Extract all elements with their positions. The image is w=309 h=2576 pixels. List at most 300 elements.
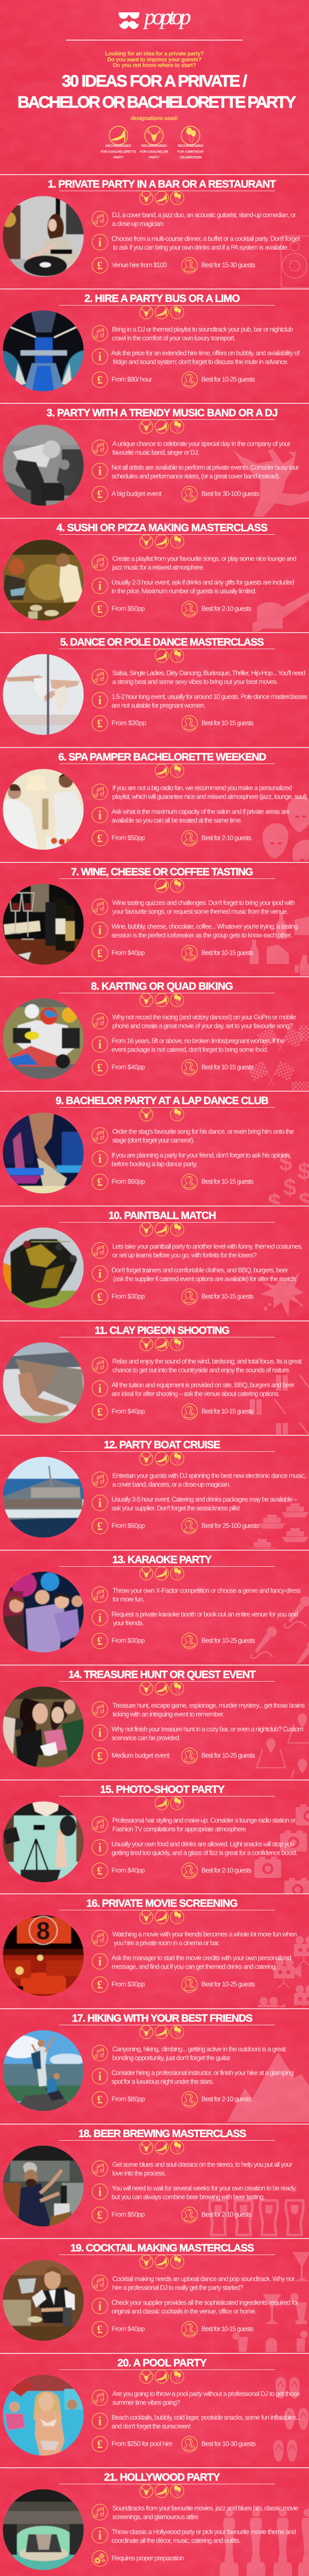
music tip: Soundtracks from your favourite movies, jazz and blues hits, classic movie <box>112 2504 299 2512</box>
budget <box>92 1518 145 1534</box>
suitability icons <box>155 1797 184 1810</box>
info tip: event package is not catered, don't forget to bring some food. <box>112 1046 268 1053</box>
budget <box>92 1977 145 1992</box>
music tip: or set up teams before you go, with forfeits for the losers? <box>112 1251 257 1259</box>
info tip: All the tuition and equipment is provided on site. BBQ, burgers and beer <box>112 1381 295 1389</box>
info tip: original and classic cocktails in the venue, office or home. <box>112 2307 256 2315</box>
music tip: crawl in the comfort of your own luxury transport. <box>112 334 235 342</box>
info tip <box>92 578 294 595</box>
info tip <box>92 1266 297 1283</box>
guests <box>182 1404 254 1419</box>
heading: 3. PARTY WITH A TRENDY MUSIC BAND OR A DJ <box>46 407 278 419</box>
music tip: Cocktail making needs an upbeat dance and pop soundtrack. Why not <box>112 2275 295 2282</box>
music tip: Wine tasting quizzes and challenges. Don't forget to bring your ipod with <box>112 899 295 907</box>
budget: From $30pp <box>112 1636 145 1645</box>
info tip: 1.5-2 hour long event, usually for around 10 guests. Pole dance masterclasses <box>112 692 308 701</box>
suitability icons <box>140 2255 184 2268</box>
music tip: Get some blues and soul classics on the stereo, to help you put all your <box>112 2161 293 2168</box>
guests <box>182 372 255 387</box>
heading: 11. CLAY PIGEON SHOOTING <box>95 1325 230 1336</box>
guests <box>182 1977 255 1992</box>
ghost icon: checkered flags <box>248 1025 309 1093</box>
info tip: scenarios can be provided. <box>112 1734 181 1741</box>
section 13 <box>0 1550 309 1672</box>
info tip <box>92 1610 298 1627</box>
heading: 10. PAINTBALL MATCH <box>108 1210 216 1222</box>
suitability icons <box>140 1910 184 1924</box>
legend: bachelorette <box>101 126 136 160</box>
music tip: Relax and enjoy the sound of the wind, birdsong, and total focus. Its a great <box>112 1357 302 1365</box>
photo: photo studio <box>3 1801 84 1883</box>
budget: Medium budget event <box>112 1752 169 1759</box>
music tip <box>92 669 305 685</box>
guests <box>182 2092 252 2107</box>
section 20 <box>0 2353 309 2462</box>
info tip: your friends. <box>113 1619 144 1627</box>
section 15 <box>0 1780 309 1899</box>
ghost icon: map pins <box>256 1714 309 1788</box>
music tip: jazz music for a relaxed atmosphere. <box>112 564 204 571</box>
photo: club dancer heel <box>3 1112 84 1194</box>
heading: 6. SPA PAMPER BACHELORETTE WEEKEND <box>58 751 266 763</box>
suitability icons <box>140 1223 184 1236</box>
music tip: Salsa, Single Ladies, Dirty Dancing, Burlesque, Thriller, Hip-Hop... You'll need <box>112 669 305 677</box>
music tip: love into the process. <box>112 2169 166 2177</box>
preparation: Requires proper preparation <box>112 2554 184 2562</box>
info tip: Usually 3-5 hour event. Catering and drinks packages may be available – <box>112 1495 298 1503</box>
legend: birthday: FOR A BIRTHDAY <box>177 150 204 154</box>
guests <box>182 1633 255 1649</box>
info tip: Don't forget trainers and comfortable clothes, and BBQ, burgers, beer <box>112 1266 288 1274</box>
budget <box>92 1060 145 1075</box>
suitability icons <box>140 2484 184 2498</box>
music tip <box>92 211 296 228</box>
intro questions: Looking for an idea for a private party? <box>105 50 204 57</box>
photo: party bus interior <box>3 310 84 392</box>
budget <box>92 2207 145 2223</box>
heading: 15. PHOTO-SHOOT PARTY <box>100 1784 225 1795</box>
guests <box>182 2207 252 2223</box>
info tip <box>92 2298 299 2315</box>
section 9 <box>0 1091 309 1215</box>
music tip <box>92 1587 301 1603</box>
info tip <box>92 1381 295 1397</box>
info tip: Ask what is the maximum capacity of the salon and if private areas are <box>112 808 290 815</box>
guests: Best for 10-15 guests <box>201 1178 254 1185</box>
suitability icons <box>155 879 184 892</box>
info tip <box>92 1954 291 1970</box>
info tip: are ideal for after shooting – ask the venue about catering options. <box>112 1390 280 1397</box>
photo: bartender <box>3 2260 84 2341</box>
budget: From $50pp <box>112 834 145 842</box>
guests <box>182 486 260 502</box>
music tip <box>92 2045 286 2062</box>
guests: Best for 10-15 guests <box>201 949 254 956</box>
budget <box>92 1863 145 1878</box>
heading: 8. KARTING OR QUAD BIKING <box>91 980 233 992</box>
heading: 4. SUSHI OR PIZZA MAKING MASTERCLASS <box>57 522 268 534</box>
ghost icon: dollar signs: $ <box>268 1189 281 1215</box>
guests: Best for 2-10 guests <box>201 2210 252 2218</box>
info tip: If you are planning a party for your friend, don't forget to ask his opinion <box>112 1151 290 1159</box>
info tip: session is the perfect icebreaker as the group gets to know each other. <box>112 931 293 939</box>
music tip: Order the stag's favourite song for his dance, or even bring him onto the <box>112 1127 294 1136</box>
heading: 5. DANCE OR POLE DANCE MASTERCLASS <box>60 636 264 648</box>
guests <box>182 1863 252 1878</box>
info tip: From 16 years, 5ft or above, no broken limbs/pregnant women. If the <box>112 1037 285 1045</box>
photo: karaoke singers <box>3 1571 84 1653</box>
music tip: Create a playlist from your favourite songs, or play some nice lounge and <box>112 554 297 563</box>
photo: band on stage <box>3 425 84 506</box>
ghost icon: dollar signs: $ <box>279 1149 293 1176</box>
guests <box>182 1289 254 1304</box>
ghost icon: wine and cheese <box>250 913 309 976</box>
photo: glamorous pool party <box>3 2489 84 2570</box>
legend: bachelorette: PARTY <box>113 156 124 160</box>
budget: From $40pp <box>112 1063 145 1071</box>
photo: spa friends in robes <box>3 769 84 850</box>
guests: Best for 10-15 guests <box>201 2325 254 2333</box>
music tip <box>92 1357 302 1374</box>
music tip: A unique chance to celebrate your special day in the company of your <box>112 440 291 447</box>
info tip <box>92 349 300 366</box>
music tip: stage (don't forget your camera!). <box>112 1137 195 1144</box>
guests <box>182 1518 260 1534</box>
info tip: to ask if you can bring your own drinks and if a PA system is available. <box>113 243 289 251</box>
guests <box>182 945 254 961</box>
music tip: bonding opportunity, just don't forget the guitar <box>112 2054 231 2062</box>
music tip <box>92 1701 305 1718</box>
guests: Best for 10-15 guests <box>201 1292 254 1300</box>
heading: 18. BEER BREWING MASTERCLASS <box>78 2128 246 2140</box>
guests <box>182 258 255 273</box>
budget: From $40pp <box>112 1408 145 1415</box>
ghost icon: pot and knife <box>252 592 309 632</box>
music tip <box>92 784 307 801</box>
guests: Best for 2-10 guests <box>201 2095 252 2103</box>
intro questions <box>105 50 204 69</box>
music tip: Why not record the racing (and victory dances!) on your GoPro or mobile <box>112 1013 296 1021</box>
music tip <box>92 326 293 342</box>
budget: From $250 for pool hire <box>112 2440 173 2447</box>
music tip <box>92 2275 295 2292</box>
guests: Best for 10-30 guests <box>201 2440 256 2447</box>
info tip <box>92 1840 298 1857</box>
budget <box>92 2436 173 2452</box>
suitability icons <box>140 1567 184 1580</box>
guests: Best for 30-100 guests <box>201 489 260 498</box>
guests <box>182 2436 256 2452</box>
photo: cinema countdown screen <box>3 1915 84 1996</box>
music tip: your favourite songs, or request some themed music from the venue. <box>112 908 288 915</box>
guests <box>182 2321 254 2337</box>
music tip: phone and create a great movie of your day, set to your favourite song? <box>112 1022 293 1029</box>
suitability icons <box>140 1337 184 1351</box>
budget <box>92 601 145 617</box>
photo: DJ at turntables <box>1 196 84 277</box>
heading: 7. WINE, CHEESE OR COFFEE TASTING <box>71 866 253 878</box>
budget: From $40pp <box>112 1866 145 1874</box>
guests: Best for 10-25 guests <box>201 375 255 383</box>
guests <box>182 601 252 617</box>
section 17 <box>0 2008 309 2123</box>
music tip: summer time vibes going? <box>112 2399 180 2406</box>
guests: Best for 15-30 guests <box>201 261 255 269</box>
intro questions: Do you not know where to start? <box>113 62 196 69</box>
ghost icon: beer glasses <box>210 2200 303 2235</box>
music tip: Fashion TV compilations for appropriate atmosphere <box>112 1825 246 1833</box>
heading: 20. A POOL PARTY <box>117 2357 207 2369</box>
info tip: Consider hiring a professional instructor, or finish your hike at a glamping <box>112 2069 294 2076</box>
title <box>18 72 296 111</box>
budget: From $60pp <box>112 1178 145 1185</box>
music tip: you hire a private room in a cinema or bar. <box>114 1939 220 1946</box>
info tip: and don't forget the sunscreen! <box>112 2422 191 2430</box>
guests: Best for 10-15 guests <box>201 1063 254 1071</box>
info tip: Usually your own food and drinks are allowed. Light snacks will stop you <box>112 1840 294 1848</box>
legend: birthday: CELEBRATION <box>179 156 202 160</box>
legend: bachelor <box>140 126 168 160</box>
heading: 2. HIRE A PARTY BUS OR A LIMO <box>84 293 240 304</box>
budget <box>92 1174 145 1190</box>
section 12 <box>0 1435 309 1553</box>
photo: brewer at the tap <box>3 2145 84 2227</box>
heading: 9. BACHELOR PARTY AT A LAP DANCE CLUB <box>56 1095 269 1107</box>
ghost icon: rock star silhouette <box>233 449 309 517</box>
legend: bachelor: FOR A BACHELOR <box>140 150 168 154</box>
music tip: chance to get out into the countryside and enjoy the sounds of nature. <box>112 1366 290 1374</box>
photo: wine bottles and glasses <box>3 884 84 965</box>
budget <box>92 945 145 961</box>
heading: 1. PRIVATE PARTY IN A BAR OR A RESTAURANT <box>48 178 276 190</box>
section 2 <box>0 289 309 392</box>
ghost icon: speaker <box>281 236 309 287</box>
info tip: Choose from a multi-course dinner, a buffet or a cocktail party. Don't forget <box>112 235 300 242</box>
music tip: for more fun. <box>112 1595 144 1603</box>
photo: friends reading clue <box>3 1686 84 1768</box>
budget <box>92 2092 145 2107</box>
info tip <box>92 1151 290 1167</box>
music tip <box>92 1471 306 1488</box>
info tip <box>92 2413 301 2430</box>
ghost icon: microphones <box>251 1594 309 1672</box>
photo: paintball team <box>3 1227 84 1309</box>
section 21 <box>0 2467 309 2576</box>
music tip: Throw your own X-Factor competition or choose a genre and fancy-dress <box>112 1587 301 1594</box>
budget <box>92 2321 145 2337</box>
info tip: ask your supplier. Don't forget the seasickness pills! <box>112 1504 240 1512</box>
preparation <box>92 2551 184 2566</box>
music tip: Treasure hunt, escape game, espionage, murder mystery... get those brains <box>112 1701 305 1709</box>
info tip: coordinate all the décor, music, catering and outfits. <box>112 2537 241 2544</box>
section 1 <box>0 174 309 287</box>
music tip: favourite music band, singer or DJ. <box>112 448 199 456</box>
section 14 <box>0 1665 309 1788</box>
music tip: If you are not a big radio fan, we recommend you make a personalized <box>112 784 292 791</box>
logo: poptop <box>143 4 191 29</box>
suitability icons <box>140 1452 184 1465</box>
info tip: are not suitable for pregnant women. <box>112 702 205 709</box>
info tip: message, and find out if you can get themed drinks and catering. <box>112 1963 277 1970</box>
guests: Best for 10-15 guests <box>201 1408 254 1415</box>
heading: 21. HOLLYWOOD PARTY <box>104 2471 220 2483</box>
music tip <box>92 554 297 571</box>
music tip: Bring in a DJ or themed playlist to soundtrack your pub, bar or nightclub <box>112 326 293 333</box>
budget: From $30pp <box>112 1980 145 1988</box>
intro questions: Do you want to impress your guests? <box>107 57 202 63</box>
section 16 <box>0 1893 309 2027</box>
info tip <box>92 2069 294 2086</box>
heading: 12. PARTY BOAT CRUISE <box>104 1439 220 1451</box>
budget <box>92 831 145 846</box>
guests <box>182 1174 254 1190</box>
legend: bachelor: PARTY <box>149 156 160 160</box>
info tip: Request a private karaoke booth or book out an entire venue for you and <box>112 1611 298 1618</box>
music tip <box>92 2504 299 2520</box>
budget <box>92 1633 145 1649</box>
ghost icon: cruise boats <box>249 1503 308 1553</box>
title: 30 IDEAS FOR A PRIVATE / <box>62 72 247 90</box>
ghost icon: cocktails <box>232 2252 309 2352</box>
photo: pool party <box>3 2375 84 2456</box>
music tip: ticking with an intriguing event to remember. <box>112 1710 225 1718</box>
title: BACHELOR OR BACHELORETTE PARTY <box>18 93 296 111</box>
header <box>18 4 296 160</box>
music tip: screenings, and glamourous attire <box>112 2513 199 2520</box>
photo: hand holding shotgun <box>3 1342 84 1423</box>
info tip <box>92 1037 285 1053</box>
info tip: Why not finish your treasure hunt in a cozy bar, or even a nightclub? Custom <box>112 1725 303 1733</box>
ghost icon: cameras <box>254 1804 309 1899</box>
budget: A big budget event <box>112 489 162 498</box>
music tip <box>92 1243 303 1259</box>
section 4 <box>0 518 309 632</box>
ghost icon: film awards statuettes <box>220 2509 309 2576</box>
guests <box>182 831 252 846</box>
music tip <box>92 2389 300 2406</box>
heading: 17. HIKING WITH YOUR BEST FRIENDS <box>72 2012 253 2024</box>
suitability icons <box>140 2370 184 2383</box>
guests <box>182 1748 255 1764</box>
budget <box>92 372 152 387</box>
guests: Best for 10-25 guests <box>201 1752 255 1759</box>
info tip: Not all artists are available to perform at private events. Consider busy tour <box>112 464 299 471</box>
music tip <box>92 1930 297 1946</box>
info tip: Throw classic a Hollywood party or pick your favourite movie theme and <box>112 2528 296 2536</box>
info tip <box>92 922 298 939</box>
suitability icons <box>155 764 184 777</box>
suitability icons <box>140 306 184 319</box>
music tip: a close-up magician. <box>112 219 164 228</box>
music tip: Entertain your guests with DJ spinning the best new electronic dance music, <box>112 1471 306 1480</box>
info tip: spot for a luxurious night under the stars. <box>112 2077 214 2086</box>
music tip: Canyoning, hiking, climbing... getting active in the outdoors is a great <box>112 2045 286 2053</box>
guests <box>182 716 254 731</box>
photo: chef masterclass <box>3 539 84 621</box>
section 18 <box>0 2124 309 2235</box>
info tip <box>92 1725 303 1741</box>
ghost icon: dollar signs <box>268 1149 309 1215</box>
music tip: Watching a movie with your friends becomes a whole lot more fun when <box>112 1930 297 1938</box>
budget: From $40pp <box>112 949 145 956</box>
info tip: getting tired too quickly, and a glass of fizz is great for a confidence boost. <box>112 1849 298 1857</box>
guests <box>182 1060 254 1075</box>
ghost icon: paint splat <box>260 1273 304 1316</box>
budget <box>92 1289 145 1304</box>
music tip <box>92 440 291 456</box>
info tip: (ask the supplier if catered event options are available) for after the match. <box>113 1275 297 1283</box>
info tip: Wine, bubbly, cheese, chocolate, coffee... Whatever you're trying, a tasting <box>112 922 298 930</box>
info tip <box>92 692 307 709</box>
photo: cinema countdown screen: 8 <box>37 1918 50 1945</box>
music tip <box>92 1013 296 1029</box>
photo: party boat <box>3 1456 84 1538</box>
info tip: in the price. Maximum number of guests is usually limited. <box>112 587 256 595</box>
legend label: designations used: <box>131 115 178 122</box>
heading: 13. KARAOKE PARTY <box>112 1554 212 1566</box>
music tip <box>92 2161 293 2177</box>
ghost icon: flip-flops <box>273 2377 308 2462</box>
info tip: Ask the manager to start the movie credits with your own personalized <box>112 1954 291 1962</box>
suitability icons <box>140 2025 184 2039</box>
info tip: Check your supplier provides all the sophisticated ingredients required for <box>112 2299 299 2306</box>
budget: From $40pp <box>112 2325 145 2333</box>
info tip: available so you can all be treated at the same time. <box>112 816 243 824</box>
budget: From $80/ hour <box>112 375 152 383</box>
legend: bachelorette: FOR A BACHELORETTE <box>101 150 136 154</box>
heading: 16. PRIVATE MOVIE SCREENING <box>87 1897 238 1909</box>
guests: Best for 10-15 guests <box>201 719 254 726</box>
guests: Best for 25-100 guests <box>201 1522 260 1529</box>
guests: Best for 2-10 guests <box>201 1866 252 1874</box>
guests: Best for 2-10 guests <box>201 605 252 612</box>
section 6 <box>0 747 309 861</box>
budget: From $80pp <box>112 2095 145 2103</box>
budget: From $50pp <box>112 605 145 612</box>
section 10 <box>0 1206 309 1316</box>
suitability icons <box>140 2141 184 2154</box>
info tip: before booking a lap dance party. <box>112 1160 198 1167</box>
suitability icons <box>140 191 184 205</box>
guests: Best for 2-10 guests <box>201 834 252 842</box>
music tip: hire a professional DJ to really get the party started? <box>112 2283 243 2292</box>
music tip: Lets take your paintball party to another level with funny, themed costumes, <box>112 1243 303 1250</box>
section 19 <box>0 2238 309 2352</box>
music tip: a cover band, dancers, or a close-up magician. <box>112 1481 231 1488</box>
info tip <box>92 234 300 251</box>
budget: From $50pp <box>112 2210 145 2218</box>
photo: go-kart racers <box>3 998 84 1079</box>
info tip: Usually 2-3 hour event, ask if drinks and any gifts for guests are included <box>112 578 294 586</box>
budget: From $30pp <box>112 1292 145 1300</box>
music tip: Are you going to throw a pool party without a professional DJ to get those <box>112 2389 300 2398</box>
info tip <box>92 463 299 480</box>
section 8 <box>0 976 309 1093</box>
photo: pole dancer <box>3 654 84 735</box>
music tip: Professional hair styling and make-up. Consider a lounge radio station or <box>112 1817 296 1824</box>
suitability icons <box>140 993 184 1007</box>
legend: bachelor: RECOMMENDED <box>141 144 167 148</box>
suitability icons <box>140 535 184 548</box>
suitability icons <box>140 1108 184 1121</box>
suitability icons <box>140 1682 184 1695</box>
guests: Best for 10-25 guests <box>201 1980 255 1988</box>
suitability icons <box>140 420 184 433</box>
heading: 19. COCKTAIL MAKING MASTERCLASS <box>71 2242 254 2254</box>
music tip <box>92 899 295 915</box>
guests: Best for 10-25 guests <box>201 1636 255 1645</box>
ghost icon: movie cameras <box>258 1936 309 2027</box>
